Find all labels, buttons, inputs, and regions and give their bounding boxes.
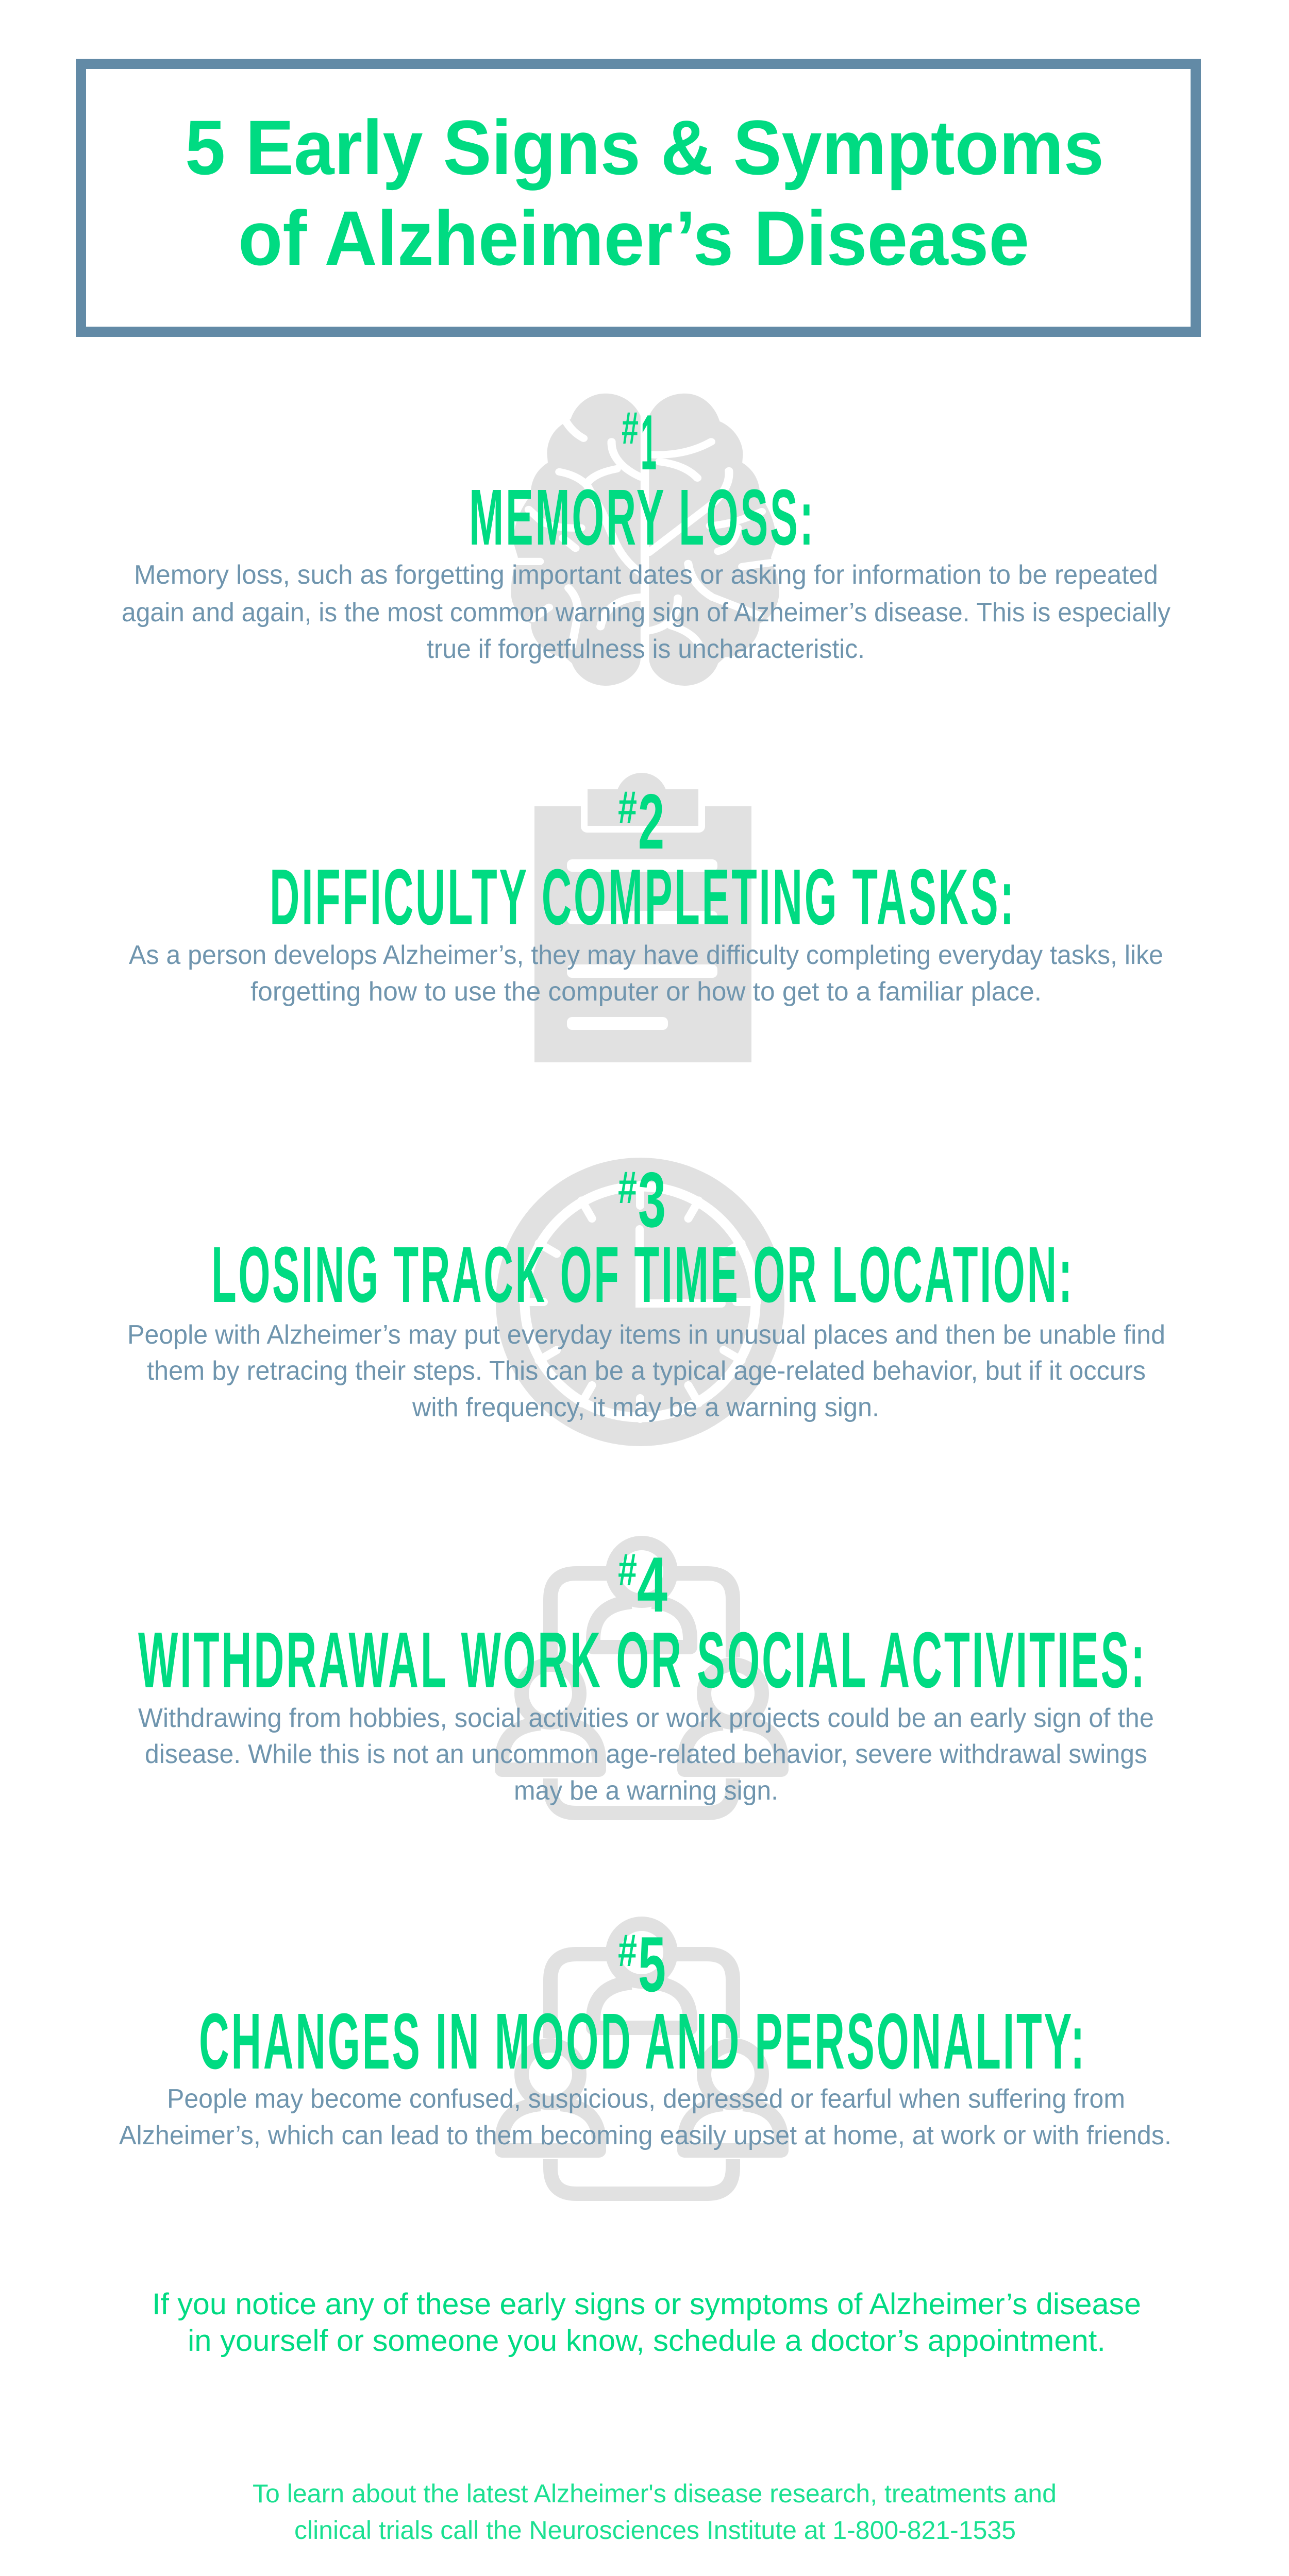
title text: 5 Early Signs & Symptoms	[185, 104, 1104, 191]
number 5: 5	[638, 1921, 666, 2008]
title text: of Alzheimer’s Disease	[238, 195, 1029, 281]
icon: clipboard	[534, 773, 751, 1062]
body text	[138, 1703, 1154, 1806]
number 4: 4	[637, 1541, 667, 1629]
panel: sign 4 withdrawal	[138, 1541, 1154, 1813]
icon: brain	[511, 394, 779, 686]
body text: with frequency, it may be a warning sign.	[412, 1393, 879, 1422]
body text: true if forgetfulness is uncharacteristic.	[427, 634, 865, 664]
body text: People with Alzheimer’s may put everyday items in unusual places and then be unable find	[127, 1320, 1165, 1350]
title panel	[81, 64, 1196, 332]
number 4	[618, 1541, 667, 1629]
number 1	[622, 399, 657, 486]
panel: sign 1 memory loss: 1	[641, 399, 657, 486]
number 3: 3	[638, 1156, 666, 1244]
body text	[119, 2084, 1171, 2150]
body text	[129, 940, 1163, 1007]
panel: sign 3 losing track of time	[127, 1156, 1165, 1446]
body text: may be a warning sign.	[514, 1776, 778, 1806]
number 2: 2	[638, 778, 664, 866]
icon: group of people	[502, 1543, 781, 1813]
body text	[122, 560, 1170, 664]
number 2: #	[618, 782, 637, 833]
call to action: If you notice any of these early signs or symptoms of Alzheimer’s disease	[152, 2287, 1141, 2321]
number 2	[618, 778, 664, 866]
panel: sign 1 memory loss	[122, 394, 1170, 686]
number 3	[618, 1156, 666, 1244]
number 1: #	[622, 402, 639, 453]
body text: Alzheimer’s, which can lead to them becoming easily upset at home, at work or with friends.	[119, 2121, 1171, 2150]
panel: sign 2 difficulty completing tasks	[129, 773, 1163, 1062]
contact information	[253, 2479, 1057, 2545]
heading: MEMORY LOSS:	[469, 473, 815, 562]
icon: group of people	[502, 1924, 781, 2194]
body text: People may become confused, suspicious, depressed or fearful when suffering from	[167, 2084, 1125, 2114]
body text: forgetting how to use the computer or how to get to a familiar place.	[250, 977, 1042, 1007]
body text: As a person develops Alzheimer’s, they may have difficulty completing everyday tasks, like	[129, 940, 1163, 970]
icon: clock	[496, 1158, 784, 1446]
contact information: clinical trials call the Neurosciences Institute at 1-800-821-1535	[294, 2516, 1016, 2545]
body text	[127, 1320, 1165, 1422]
body text: Memory loss, such as forgetting important dates or asking for information to be repeated	[134, 560, 1158, 590]
body text: disease. While this is not an uncommon age-related behavior, severe withdrawal swings	[145, 1739, 1147, 1769]
call to action: in yourself or someone you know, schedule a doctor’s appointment.	[188, 2324, 1106, 2358]
panel: sign 5 mood changes	[119, 1921, 1171, 2194]
body text: them by retracing their steps. This can be a typical age-related behavior, but if it occurs	[147, 1356, 1146, 1386]
contact information: To learn about the latest Alzheimer's disease research, treatments and	[253, 2479, 1057, 2508]
number 5	[618, 1921, 666, 2008]
body text: Withdrawing from hobbies, social activities or work projects could be an early sign of the	[138, 1703, 1154, 1733]
body text: again and again, is the most common warning sign of Alzheimer’s disease. This is especially	[122, 598, 1170, 628]
number 3: #	[618, 1162, 637, 1213]
number 5: #	[618, 1925, 637, 1976]
title text	[185, 104, 1104, 281]
call to action	[152, 2287, 1141, 2358]
number 4: #	[618, 1544, 637, 1595]
